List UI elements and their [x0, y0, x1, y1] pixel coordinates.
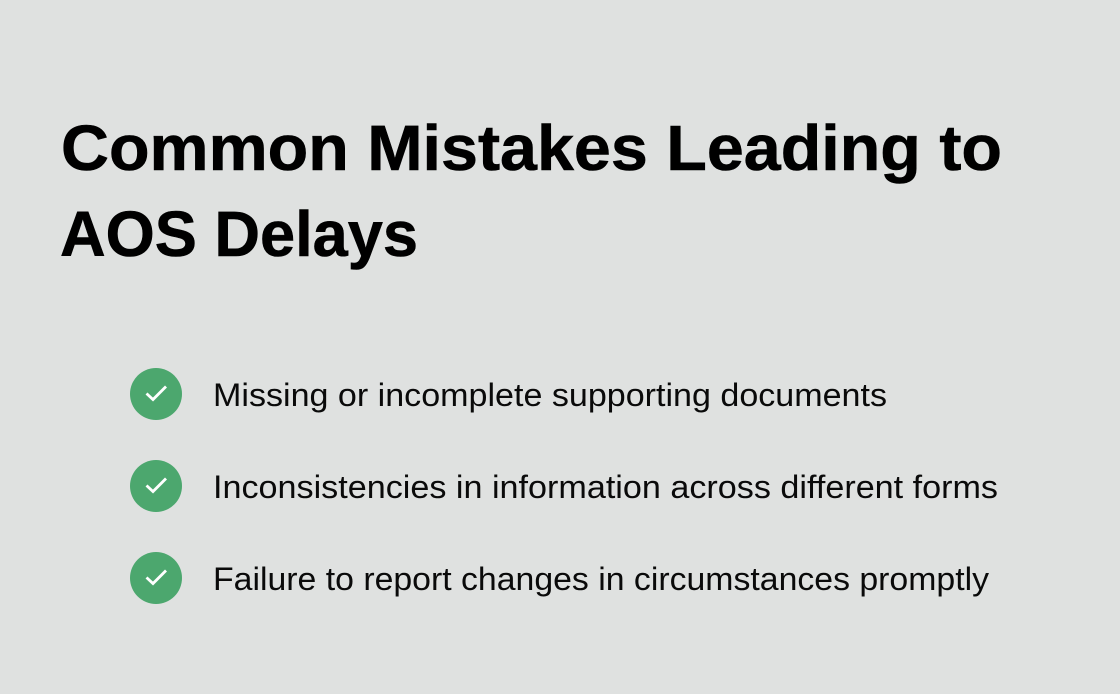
- title: AOS Delays: [60, 198, 418, 270]
- list item: failure to report: [130, 552, 989, 604]
- title: [60, 112, 1002, 270]
- list of mistakes: [130, 368, 998, 604]
- item text: Failure to report changes in circumstances promptly: [213, 561, 989, 597]
- icon: check mark: [130, 368, 182, 420]
- list item: inconsistencies: [130, 460, 998, 512]
- list item: missing documents: [130, 368, 887, 420]
- icon: check mark: [130, 460, 182, 512]
- item text: Missing or incomplete supporting documents: [213, 377, 887, 413]
- item text: Inconsistencies in information across different forms: [213, 469, 998, 505]
- icon: check mark: [130, 552, 182, 604]
- title: Common Mistakes Leading to: [61, 112, 1002, 184]
